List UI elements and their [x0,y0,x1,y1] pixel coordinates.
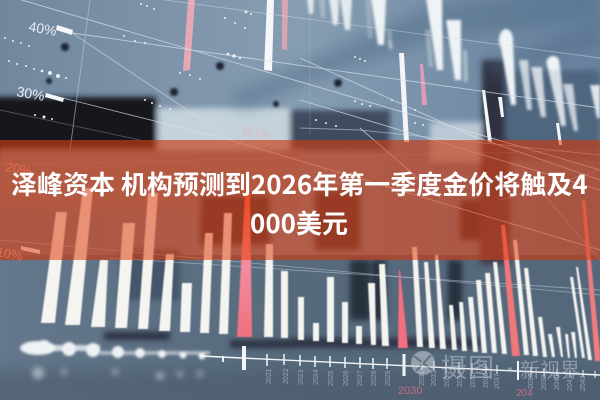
bar chart [41,188,600,361]
watermark: ·新视界 [500,354,580,383]
axis label: 10% [0,244,40,264]
axis label: 20%: 20% [4,159,33,179]
title: 000美元 [250,204,348,241]
year labels under axis: 2038 [528,373,535,389]
axis label: 40%: 40% [27,18,58,39]
year labels under axis: 2029 [385,370,392,386]
title: 泽峰资本 机构预测到2026年第一季度金价将触及4 [11,165,588,202]
watermark: 摄图 [441,348,495,385]
year labels under axis: 2033 [444,371,451,387]
year labels under axis: 2036 [483,372,490,388]
year labels under axis: 2028 [371,370,378,386]
orange title band [0,140,600,260]
year labels under axis: 2023 [298,369,305,385]
year labels under axis: 2021 [266,368,273,384]
trend lines [0,0,600,295]
upper hanging blurred bars [307,0,600,131]
pink year labels: 2030 [398,385,422,397]
year labels under axis: 2027 [357,370,364,386]
year labels under axis: 2025 [328,370,335,386]
timeline axis [20,340,600,380]
year labels under axis: 2026 [343,370,350,386]
year labels under axis: 2022 [283,368,290,384]
small data dots [4,3,424,127]
axis label: 40% [27,18,73,39]
axis label: 30% [15,83,64,104]
axis label: 30%: 30% [15,83,46,104]
watermark [411,348,580,385]
blurred dark markers [46,43,342,107]
upper sharp bars [183,0,562,145]
year labels under axis: 2032 [431,370,438,386]
title [11,165,588,241]
faint label: 80%: 80% [241,122,272,143]
year labels under axis: 2035 [470,372,477,388]
year labels under axis: 2042 [580,375,587,391]
year labels under axis: 2031 [419,370,426,386]
year labels under axis: 2034 [457,371,464,387]
year labels under axis: 2040 [554,374,561,390]
year labels under axis: 2041 [567,375,574,391]
year labels under axis: 2037 [494,373,501,389]
year labels under axis [266,368,587,391]
year labels under axis: 2024 [313,369,320,385]
year labels under axis: 2039 [541,374,548,390]
pink year labels: 204 [516,388,533,399]
pink year labels [398,385,533,399]
